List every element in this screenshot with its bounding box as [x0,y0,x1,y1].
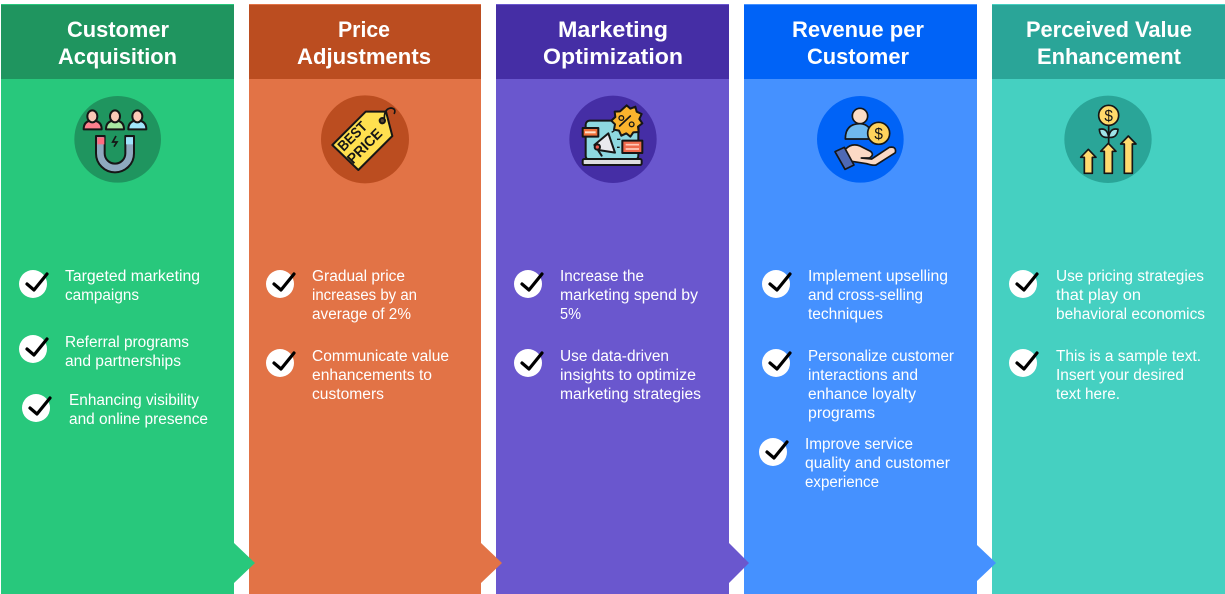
header: customer acquisition: Acquisition [58,44,177,69]
panel: price adjustments [249,4,481,594]
header: revenue per customer [744,5,977,79]
item: referral programs [19,334,189,370]
item: targeted marketing [19,268,200,304]
panel: customer acquisition [1,4,234,594]
list: perceived value enhancement [1009,268,1205,403]
item: personalize interactions: programs [808,405,875,422]
header: marketing optimization [496,5,729,79]
icon: laptop with megaphone [569,96,657,183]
header: price adjustments: Adjustments [297,44,431,69]
arrow: marketing optimization to revenue per customer [729,543,749,583]
item: communicate value: enhancements to [312,367,432,384]
header: marketing optimization: Marketing [558,17,668,42]
icon: money plant and growth arrows [1064,96,1152,183]
item: sample text [1009,348,1201,403]
item: personalize interactions: interactions and [808,367,918,384]
header: marketing optimization: Optimization [543,44,683,69]
item: pricing strategies [1009,268,1205,323]
item: pricing strategies: behavioral economics [1056,306,1205,323]
item: data-driven insights: marketing strategies [560,386,701,403]
list: customer acquisition [19,268,208,428]
item: sample text: text here. [1056,386,1120,403]
item: referral programs: Referral programs [65,334,189,351]
header: revenue per customer: Customer [807,44,909,69]
header: price adjustments: Price [338,17,390,42]
item: upselling [762,268,948,323]
icon: money plant and growth arrows: $ [1104,108,1113,125]
item: data-driven insights [514,348,701,403]
item: sample text: Insert your desired [1056,367,1184,384]
icon: best price tag: PRICE [345,126,386,167]
item: gradual price increases: average of 2% [312,306,411,323]
item: personalize interactions [762,348,954,422]
item: online presence: and online presence [69,411,208,428]
item: targeted marketing: campaigns [65,287,139,304]
item: personalize interactions: Personalize customer [808,348,954,365]
icon: hand holding customer and coin: $ [874,126,883,143]
item: data-driven insights: Use data-driven [560,348,669,365]
item: service quality [759,436,950,491]
item: communicate value [266,348,449,403]
list: revenue per customer [759,268,954,491]
item: gradual price increases: increases by an [312,287,417,304]
item: communicate value: Communicate value [312,348,449,365]
header: customer acquisition [1,5,234,79]
item: online presence: Enhancing visibility [69,392,199,409]
item: online presence [22,392,208,428]
item: pricing strategies: that play on [1056,287,1141,304]
item: pricing strategies: Use pricing strategies [1056,268,1204,285]
panel: marketing optimization [496,4,729,594]
arrow: price adjustments to marketing optimization [481,543,502,583]
item: personalize interactions: enhance loyalty [808,386,916,403]
item: service quality: quality and customer [805,455,950,472]
item: marketing spend: marketing spend by [560,287,698,304]
item: service quality: experience [805,474,879,491]
item: marketing spend: Increase the [560,268,644,285]
item: communicate value: customers [312,386,384,403]
header: revenue per customer: Revenue per [792,17,924,42]
header: perceived value enhancement: Perceived Value [1026,17,1192,42]
icon: hand holding customer and coin [817,96,904,183]
list: price adjustments [266,268,449,403]
item: gradual price increases: Gradual price [312,268,405,285]
list: marketing optimization [514,268,701,403]
item: upselling: Implement upselling [808,268,948,285]
item: gradual price increases [266,268,417,323]
panel: perceived value enhancement [992,4,1225,594]
header: perceived value enhancement: Enhancement [1037,44,1181,69]
header: customer acquisition: Customer [67,17,169,42]
header: price adjustments [249,5,481,79]
item: marketing spend: 5% [560,306,581,323]
icon: magnet attracting people [74,96,161,183]
header: perceived value enhancement [992,5,1225,79]
item: upselling: techniques [808,306,883,323]
item: sample text: This is a sample text. [1056,348,1201,365]
icon: best price tag: BEST [335,119,371,155]
arrow: revenue per customer to perceived value enhancement [977,545,996,581]
item: service quality: Improve service [805,436,913,453]
item: referral programs: and partnerships [65,353,181,370]
arrow: customer acquisition to price adjustments [234,543,255,583]
icon: best price tag [321,95,409,183]
item: marketing spend [514,268,698,323]
item: upselling: and cross-selling [808,287,923,304]
panel: revenue per customer [744,4,977,594]
item: data-driven insights: insights to optimize [560,367,696,384]
item: targeted marketing: Targeted marketing [65,268,200,285]
